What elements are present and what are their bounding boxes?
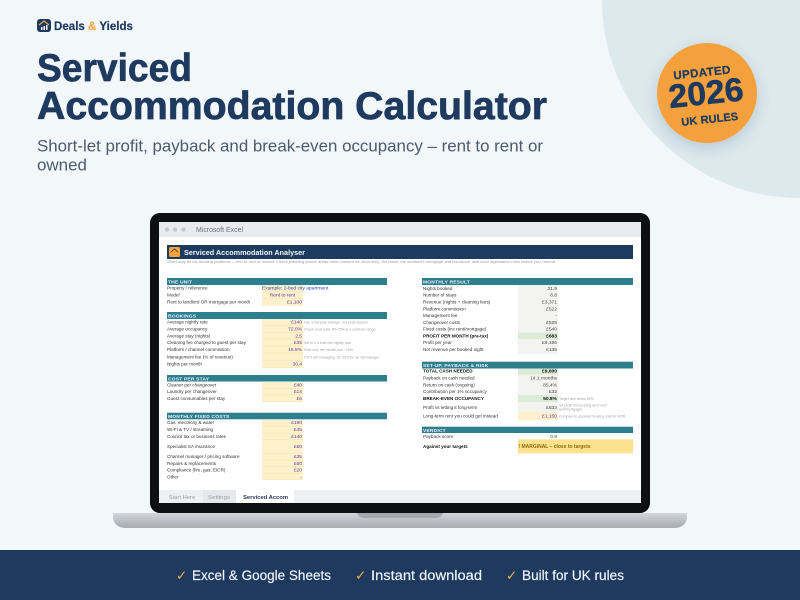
panel: monthly result: Changeover costs [423, 320, 461, 325]
panel: monthly result: £683 [546, 333, 557, 339]
panel: bookings: Management fee (% of revenue) [167, 354, 233, 360]
panel: monthly fixed costs: Council tax or business rates [167, 434, 227, 439]
panel: set-up, payback and risk [422, 362, 633, 420]
panel: monthly result: Number of stays [423, 293, 457, 298]
panel: monthly result: Nights booked [423, 286, 453, 291]
badge: updated 2026 UK rules [657, 43, 757, 143]
panel: set-up, payback and risk: Return on cash (ongoing) [423, 382, 475, 388]
laptop bezel [150, 213, 650, 513]
panel: monthly fixed costs: - [300, 476, 302, 480]
panel: set-up, payback and risk: 14.1 months [530, 376, 558, 382]
panel: set-up, payback and risk: Target well below 80% [559, 397, 594, 401]
panel: set-up, payback and risk: SA profit minus (long-term rent - [559, 404, 609, 408]
footer bar: Excel & Google Sheets [192, 568, 331, 583]
panel: monthly fixed costs: Gas, electricity & water [167, 420, 214, 425]
panel: cost per stay: £14 [294, 389, 302, 395]
panel: bookings: 30.4 [292, 362, 302, 368]
window title bar: Microsoft Excel [196, 227, 243, 234]
panel: bookings: 0% if self managing; 15–25% for an SA manager. [304, 356, 380, 360]
panel: monthly result: Revenue (nights + cleaning fees) [423, 300, 491, 304]
sheet title banner [167, 245, 633, 259]
panel: set-up, payback and risk: TOTAL CASH NEEDED [423, 369, 473, 374]
panel: set-up, payback and risk: Long-term rent you could get instead [423, 414, 498, 418]
panel: bookings: Average nightly rate [167, 320, 208, 324]
panel: monthly result: 21.9 [547, 286, 557, 292]
panel: the unit: Example: 2-bed city apartment [262, 286, 329, 292]
panel: set-up, payback and risk: BREAK-EVEN OCCUPANCY [423, 396, 484, 401]
panel: monthly result: Fixed costs (inc rent/mortgage) [423, 326, 487, 332]
panel: monthly fixed costs: Compliance (fire, gas, EICR) [167, 468, 226, 472]
panel: set-up, payback and risk: 50.8% [543, 396, 558, 402]
panel: monthly result: Profit per year [423, 340, 452, 345]
panel: verdict: 0.9 [550, 434, 557, 440]
panel: set-up, payback and risk: £9,600 [542, 369, 557, 375]
sheet title banner: Serviced Accommodation Analyser [184, 248, 305, 257]
panel: cost per stay [167, 375, 387, 402]
footer bar [0, 550, 800, 600]
panel: monthly result: Management fee [423, 313, 458, 318]
panel: the unit: Rent to rent [270, 292, 296, 298]
panel: monthly result: £540 [546, 326, 557, 332]
panel: monthly fixed costs: Specialist SA insurance [167, 444, 215, 449]
title: Serviced [37, 47, 192, 90]
sheet tabs: Settings [208, 495, 230, 501]
panel: set-up, payback and risk: Payback on cash needed [423, 376, 475, 380]
panel: bookings: Average stay (nights) [167, 334, 211, 338]
panel: set-up, payback and risk: Compare to assured housing cost for ROR. [559, 414, 626, 418]
panel: the unit: Rent to landlord OR mortgage per month [167, 300, 251, 304]
panel: bookings: £35 [294, 340, 302, 346]
panel: monthly result: - [555, 314, 557, 319]
panel: cost per stay: £40 [294, 382, 302, 388]
panel: monthly fixed costs: MONTHLY FIXED COSTS [168, 414, 230, 420]
panel: bookings: Platform / channel commission [167, 347, 230, 352]
panel: set-up, payback and risk: £633 [546, 405, 557, 411]
subtitle: owned [37, 156, 87, 175]
panel: monthly fixed costs [167, 413, 387, 480]
panel: monthly result: Net revenue per booked night [423, 347, 484, 352]
panel: monthly result: £3,371 [542, 300, 557, 306]
panel: monthly result: PROFIT PER MONTH (pre-tax) [423, 333, 489, 338]
subtitle: Short-let profit, payback and break-even occupancy – rent to rent or [37, 136, 543, 156]
laptop base [113, 513, 687, 528]
panel: bookings: BOOKINGS [168, 314, 197, 320]
laptop [113, 213, 687, 528]
logo: Deals & Yields [54, 19, 133, 33]
sheet tabs [159, 490, 641, 503]
panel: the unit: THE UNIT [168, 280, 192, 286]
panel: monthly fixed costs: £190 [291, 420, 302, 426]
panel: bookings: Average occupancy [167, 326, 208, 332]
panel: the unit: £1,100 [287, 300, 302, 306]
footer bar: Instant download [371, 568, 482, 583]
panel: bookings: Cleaning fee charged to guest per stay [167, 340, 247, 345]
window title bar [159, 222, 641, 237]
panel: bookings: Check local data; 60–75% is a common range. [304, 328, 376, 332]
panel: monthly result: £525 [546, 320, 557, 326]
footer bar: Built for UK rules [522, 568, 624, 583]
panel: the unit: Property / reference [167, 286, 208, 291]
panel: monthly fixed costs: £20 [294, 468, 302, 474]
panel: monthly result: Platform commission [423, 306, 466, 311]
panel: monthly result: £522 [546, 306, 557, 312]
panel: bookings [167, 312, 387, 368]
panel: set-up, payback and risk: Contribution per 1% occupancy [423, 389, 488, 394]
panel: the unit: Model [167, 292, 180, 298]
badge: updated 2026 UK rules: UK RULES [681, 111, 739, 129]
panel: verdict: Payback score [423, 434, 454, 439]
sheet intro note: Short-stay let via booking platforms – rent-to-rent or owned. Check planning (some areas need consent for short-lets), the lease, the landlord's mortgage and insurance, and local registration rules before you commit. [167, 259, 556, 264]
panel: monthly fixed costs: £35 [294, 454, 302, 460]
panel: monthly fixed costs: Other [167, 474, 179, 480]
panel: monthly result: £136 [546, 347, 557, 353]
panel: monthly fixed costs: £50 [294, 444, 302, 450]
panel: bookings: Nights per month [167, 362, 202, 366]
badge: updated 2026 UK rules: 2026 [667, 70, 745, 115]
sheet tabs: Start Here [169, 495, 195, 501]
panel: bookings: Set to 0 if built into nightly rate. [304, 341, 352, 345]
panel: cost per stay: Cleaner per changeover [167, 382, 217, 388]
panel: monthly result: 8.8 [550, 293, 557, 299]
panel: monthly fixed costs: Channel manager / pricing software [167, 454, 240, 459]
panel: verdict: ! MARGINAL – close to targets [518, 444, 591, 450]
panel: bookings: Use a full-year average, not peak season. [304, 320, 369, 324]
panel: set-up, payback and risk: SET-UP, PAYBACK & RISK [423, 363, 489, 369]
panel: cost per stay: £6 [297, 396, 302, 402]
panel: verdict [422, 427, 633, 453]
panel: monthly fixed costs: £45 [294, 427, 302, 433]
panel: set-up, payback and risk: Profit vs letting it long-term [423, 405, 478, 410]
badge: updated 2026 UK rules: UPDATED [673, 64, 731, 82]
panel: cost per stay: Laundry per changeover [167, 389, 217, 394]
panel: monthly result [422, 278, 633, 354]
panel: set-up, payback and risk: rent/mortgage). [559, 408, 583, 412]
panel: monthly fixed costs: £140 [291, 434, 302, 440]
panel: monthly result: MONTHLY RESULT [423, 280, 470, 286]
sheet tabs: Serviced Accom [243, 495, 288, 501]
panel: bookings: 2.5 [295, 334, 302, 340]
panel: bookings: 15.5% [288, 347, 303, 353]
panel: verdict: Against your targets [423, 444, 468, 449]
panel: set-up, payback and risk: 85.4% [543, 382, 558, 388]
title [37, 47, 547, 128]
footer bar: ✓ [176, 568, 187, 583]
panel: monthly result: £8,196 [542, 340, 557, 346]
footer bar: ✓ [355, 568, 366, 583]
panel: monthly fixed costs: Wi-Fi & TV / streaming [167, 427, 214, 432]
screen [159, 222, 641, 503]
title: Accommodation Calculator [37, 85, 547, 128]
footer bar: ✓ [506, 568, 517, 583]
panel: monthly fixed costs: £60 [294, 461, 302, 467]
panel: bookings: £140 [291, 320, 302, 326]
subtitle [37, 136, 543, 175]
panel: set-up, payback and risk: £1,150 [542, 414, 557, 420]
panel: verdict: VERDICT [423, 428, 446, 434]
panel: bookings: 72.0% [288, 326, 303, 332]
panel: set-up, payback and risk: £32 [549, 389, 557, 395]
panel: cost per stay: COST PER STAY [168, 376, 210, 382]
panel: cost per stay: Guest consumables per stay [167, 396, 226, 401]
panel: monthly fixed costs: Repairs & replacements [167, 461, 217, 466]
panel: the unit [167, 278, 387, 306]
panel: bookings: Host-only fee models are ~15%. [304, 348, 354, 352]
